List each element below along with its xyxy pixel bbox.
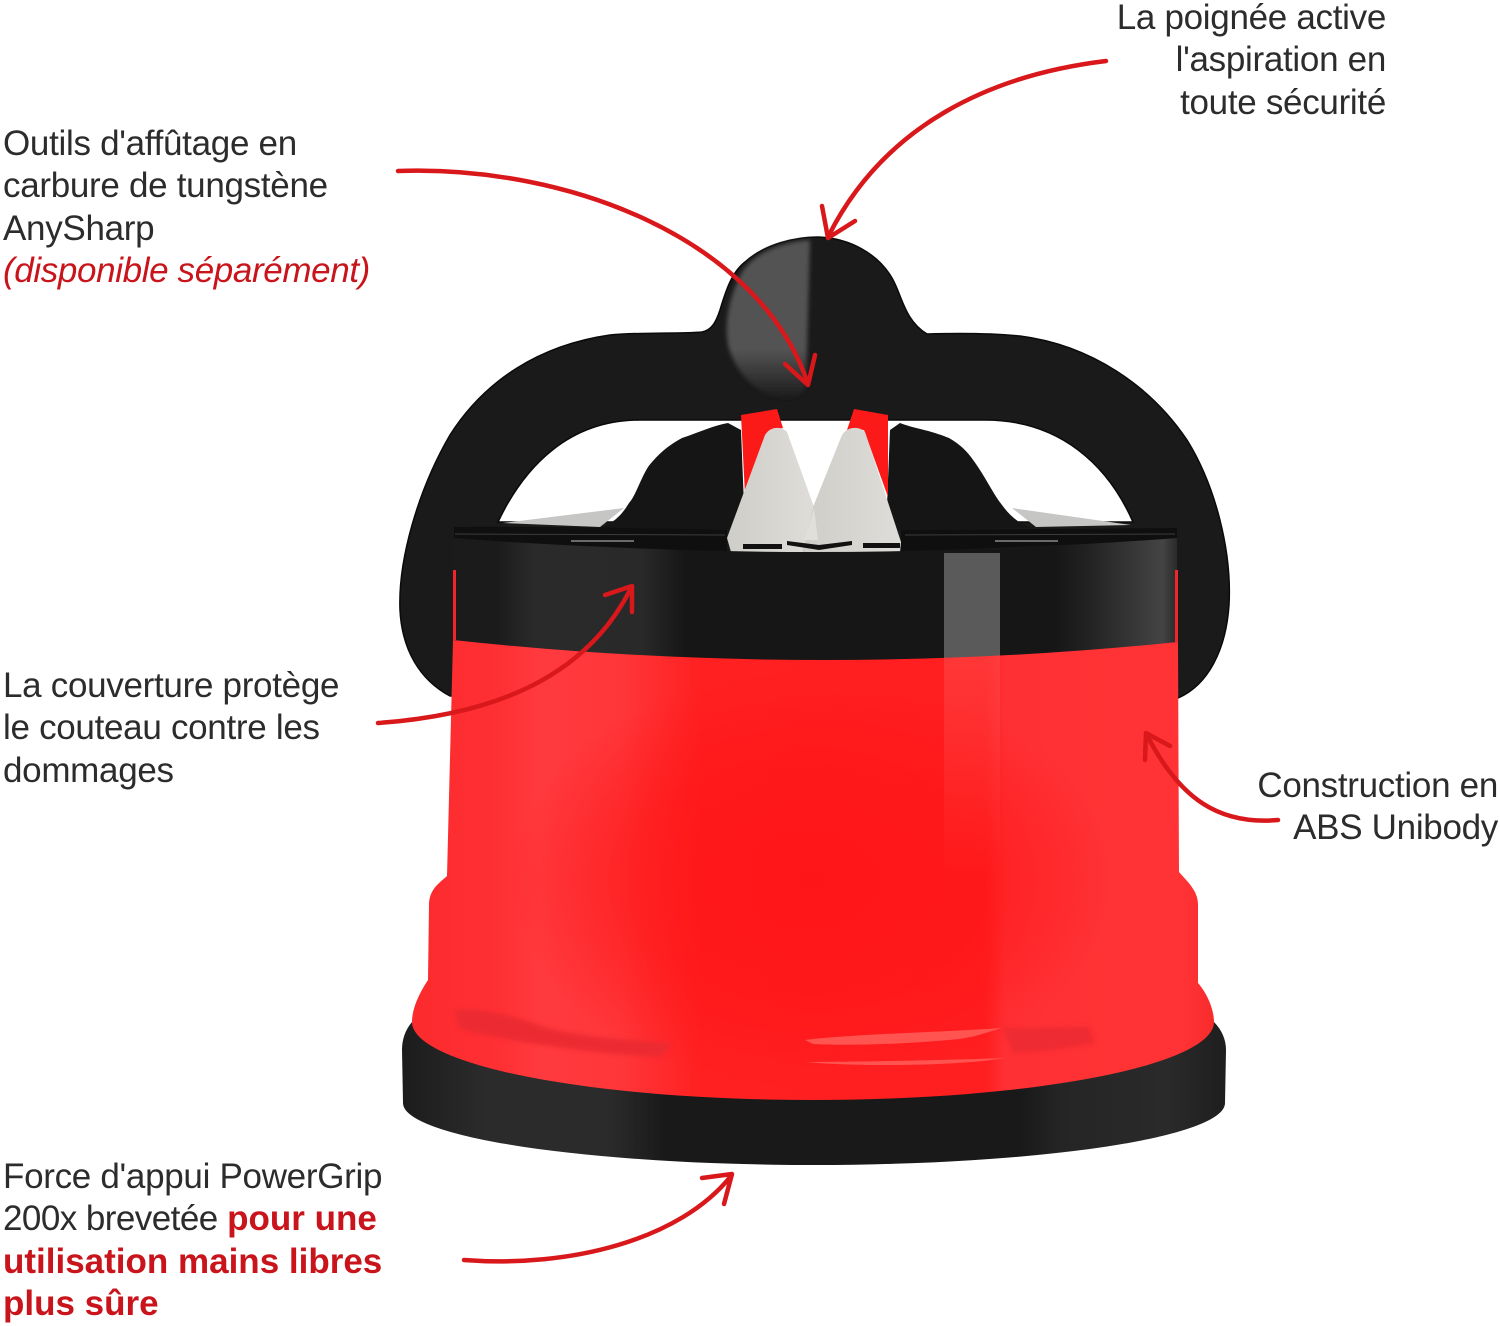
handle bbox=[400, 237, 1229, 698]
text: sharpening tools callout: AnySharp bbox=[3, 209, 154, 248]
text: ABS callout bbox=[1257, 766, 1498, 847]
handle highlight bbox=[727, 240, 810, 398]
text: sharpening tools callout: Outils d'affûtage en bbox=[3, 124, 297, 163]
text: handle callout: toute sécurité bbox=[1180, 83, 1386, 122]
arrow: base bbox=[464, 1174, 732, 1261]
text: cover callout: dommages bbox=[3, 751, 174, 790]
text: cover callout: La couverture protège bbox=[3, 666, 339, 705]
arrow: handle suction bbox=[822, 61, 1106, 238]
black base bbox=[402, 1022, 1226, 1165]
text: ABS callout: Construction en bbox=[1257, 766, 1498, 805]
text: sharpening tools callout: carbure de tungstène bbox=[3, 166, 328, 205]
text: grip callout: 200x brevetée pour une bbox=[3, 1199, 377, 1238]
text: cover callout: le couteau contre les bbox=[3, 708, 320, 747]
text: grip callout: utilisation mains libres bbox=[3, 1242, 382, 1281]
product illustration: knife sharpener bbox=[399, 236, 1230, 1165]
red slivers on cover edge bbox=[453, 570, 1178, 642]
text: handle callout bbox=[1117, 0, 1386, 122]
screws bbox=[571, 540, 1058, 542]
body sheen bbox=[455, 1010, 672, 1057]
inner grey plates bbox=[503, 508, 1131, 527]
text: ABS callout: ABS Unibody bbox=[1293, 808, 1498, 847]
inner black bosses bbox=[598, 423, 1033, 530]
text: handle callout: l'aspiration en bbox=[1176, 40, 1386, 79]
text: grip callout: plus sûre bbox=[3, 1284, 159, 1323]
arrow: ABS body bbox=[1145, 733, 1278, 821]
text: grip callout: Force d'appui PowerGrip bbox=[3, 1157, 382, 1196]
arrow: cover bbox=[378, 586, 632, 723]
text: cover callout bbox=[3, 666, 339, 790]
text: grip callout bbox=[3, 1157, 382, 1323]
red body bbox=[400, 630, 1230, 1110]
cover band bbox=[453, 527, 1177, 661]
text: sharpening tools callout: (disponible séparément) bbox=[3, 251, 370, 290]
text: sharpening tools callout bbox=[3, 124, 370, 290]
tungsten blades bbox=[727, 428, 814, 552]
red carbide holders bbox=[741, 409, 888, 497]
arrow: sharpening tools bbox=[398, 171, 815, 385]
